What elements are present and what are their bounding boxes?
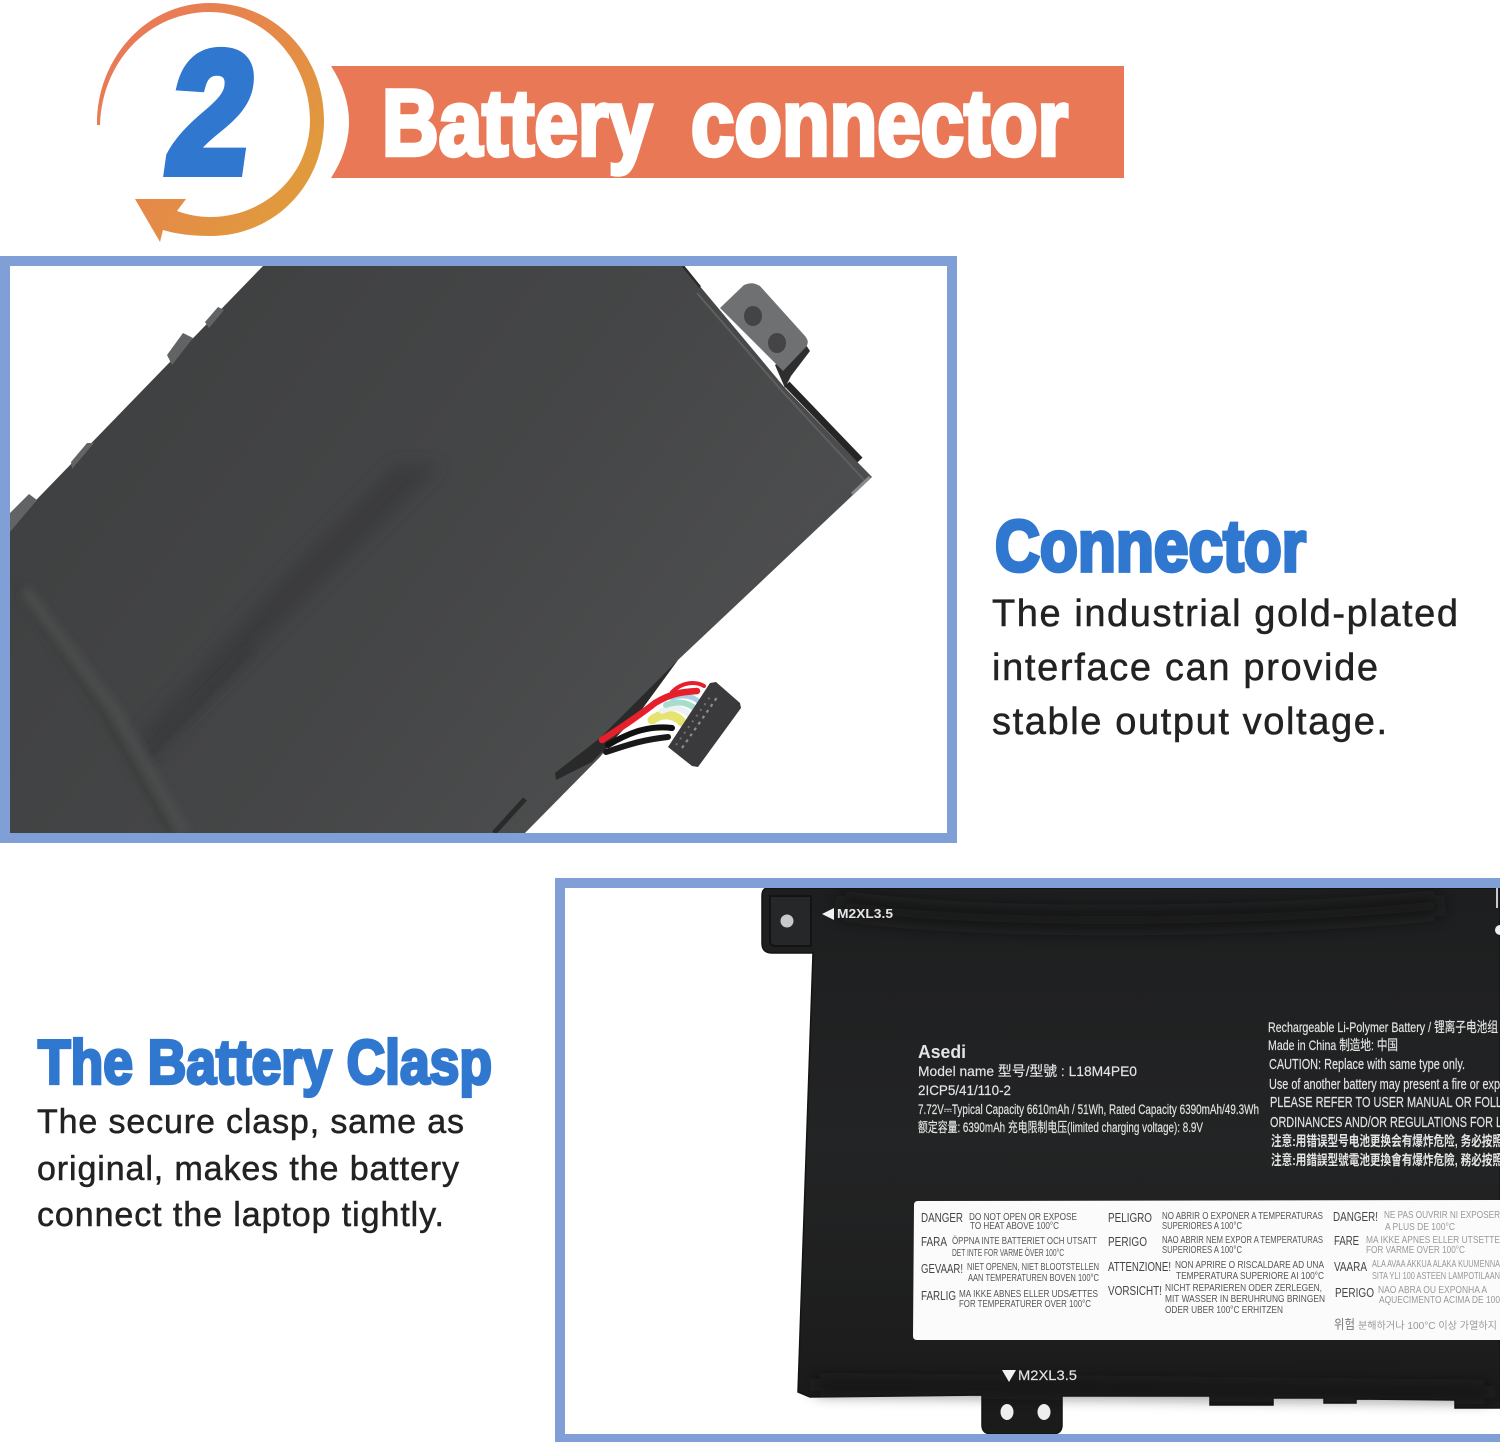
small side tabs bbox=[10, 307, 224, 532]
battery label left: model info: 额定容量: 6390mAh 充电限制电压(limited charging voltage): 8.9V bbox=[918, 1119, 1203, 1135]
clasp holes bbox=[780, 888, 1500, 1420]
battery label left: model info: Model name 型号/型號 : L18M4PE0 bbox=[918, 1063, 1137, 1079]
warning label: A PLUS DE 100°C bbox=[1385, 1222, 1455, 1233]
title banner: Battery bbox=[382, 70, 652, 175]
screw mark bottom: M2XL3.5 bbox=[1018, 1367, 1077, 1383]
warning label: FARLIG bbox=[921, 1288, 956, 1303]
warning label: 위험 bbox=[1334, 1317, 1355, 1332]
connector plug bbox=[668, 682, 741, 767]
heading: Connector: Connector bbox=[995, 507, 1306, 587]
warning label: FARE bbox=[1334, 1233, 1359, 1248]
warning label: PELIGRO bbox=[1108, 1210, 1152, 1225]
wire harness bbox=[602, 683, 704, 752]
warning label: DANGER! bbox=[1333, 1209, 1378, 1224]
circular arrow icon bbox=[97, 3, 324, 242]
panel: battery connector photo bbox=[5, 261, 952, 838]
text block: connector description bbox=[992, 593, 1458, 743]
text block: clasp description: The secure clasp, same as bbox=[37, 1103, 464, 1141]
warning label: ÖPPNA INTE BATTERIET OCH UTSATT bbox=[952, 1235, 1097, 1247]
battery label left: model info: Asedi bbox=[918, 1042, 966, 1062]
warning label: NAO ABRIR NEM EXPOR A TEMPERATURAS bbox=[1162, 1235, 1323, 1246]
text block: connector description: The industrial gold-plated bbox=[992, 593, 1458, 635]
battery body bbox=[10, 266, 880, 833]
battery label right: caution bbox=[1268, 1019, 1500, 1168]
screw mark bottom bbox=[1002, 1370, 1076, 1382]
screw mark top bbox=[822, 908, 893, 920]
text block: clasp description: original, makes the battery bbox=[37, 1150, 459, 1188]
title banner bbox=[331, 66, 1124, 178]
warning label: DET INTE FOR VARME ÖVER 100°C bbox=[952, 1247, 1064, 1259]
warning label: FOR TEMPERATURER OVER 100°C bbox=[959, 1299, 1091, 1310]
warning label: NO ABRIR O EXPONER A TEMPERATURAS bbox=[1162, 1211, 1323, 1222]
warning label: DO NOT OPEN OR EXPOSE bbox=[969, 1212, 1077, 1223]
step number badge bbox=[97, 3, 324, 242]
warning label: TO HEAT ABOVE 100°C bbox=[970, 1221, 1059, 1232]
panel frame bbox=[5, 261, 952, 838]
warning label: AAN TEMPERATUREN BOVEN 100°C bbox=[968, 1273, 1099, 1284]
warning label: TEMPERATURA SUPERIORE AI 100°C bbox=[1176, 1271, 1324, 1282]
battery label left: model info: 2ICP5/41/110-2 bbox=[918, 1082, 1011, 1098]
warning label: SUPERIORES A 100°C bbox=[1162, 1221, 1242, 1232]
mounting tab with two holes bbox=[720, 283, 810, 388]
text block: clasp description bbox=[37, 1103, 464, 1234]
number 2: 2 bbox=[158, 18, 266, 209]
warning label: SUPERIORES A 100°C bbox=[1162, 1245, 1242, 1256]
warning label: NON APRIRE O RISCALDARE AD UNA bbox=[1175, 1260, 1324, 1271]
warning label: FOR VARME OVER 100°C bbox=[1366, 1245, 1465, 1256]
warning label: MA IKKE ABNES ELLER UDSÆTTES bbox=[959, 1289, 1098, 1300]
battery label right: caution: Made in China 制造地: 中国 bbox=[1268, 1037, 1398, 1053]
screw mark top: M2XL3.5 bbox=[837, 907, 893, 921]
panel frame bbox=[560, 883, 1500, 1439]
warning label: FARA bbox=[921, 1234, 947, 1249]
warning label: MIT WASSER IN BERUHRUNG BRINGEN bbox=[1165, 1294, 1325, 1305]
battery body with tabs bbox=[762, 888, 1500, 1434]
warning label: VAARA bbox=[1334, 1259, 1367, 1274]
warning label: PERIGO bbox=[1108, 1234, 1147, 1249]
warning label: VORSICHT! bbox=[1108, 1283, 1162, 1298]
warning label: 분해하거나 100°C 이상 가열하지 bbox=[1358, 1319, 1497, 1332]
warning label bbox=[913, 1200, 1500, 1340]
text block: connector description: stable output voltage. bbox=[992, 701, 1387, 743]
battery label left: model info bbox=[918, 1042, 1259, 1135]
text block: connector description: interface can provide bbox=[992, 647, 1378, 689]
warning label: NICHT REPARIEREN ODER ZERLEGEN, bbox=[1165, 1283, 1322, 1294]
text block: clasp description: connect the laptop tightly. bbox=[37, 1196, 444, 1234]
warning label: PERIGO bbox=[1335, 1285, 1374, 1300]
warning label: ATTENZIONE! bbox=[1108, 1259, 1171, 1274]
battery label left: model info: 7.72V⎓Typical Capacity 6610mAh / 51Wh, Rated Capacity 6390mAh/49.3Wh bbox=[918, 1102, 1259, 1117]
warning label: ODER UBER 100°C ERHITZEN bbox=[1165, 1305, 1283, 1316]
heading: The Battery Clasp: The Battery Clasp bbox=[38, 1028, 492, 1098]
title banner: connector bbox=[691, 70, 1068, 175]
warning label: DANGER bbox=[921, 1210, 963, 1225]
warning label: GEVAAR! bbox=[921, 1261, 963, 1276]
panel: battery clasp photo bbox=[560, 883, 1500, 1439]
warning label: NIET OPENEN, NIET BLOOTSTELLEN bbox=[967, 1262, 1099, 1273]
